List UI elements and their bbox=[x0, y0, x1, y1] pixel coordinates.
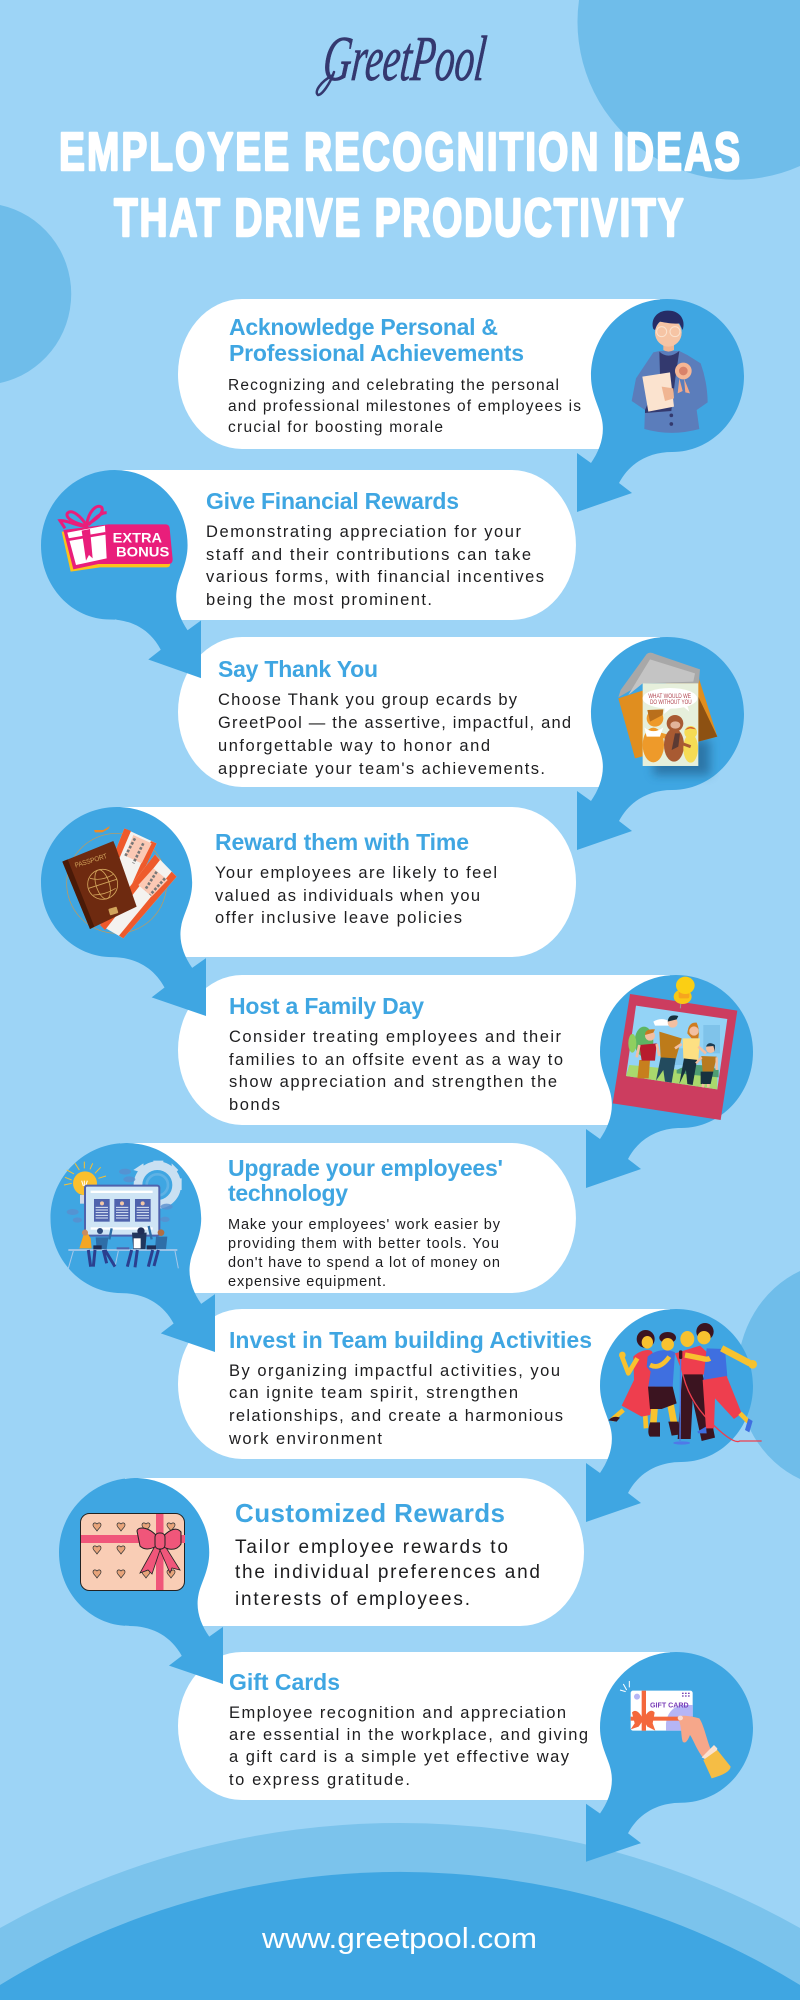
icon: extra bonus gift: EXTRA bbox=[113, 530, 162, 546]
body text bbox=[215, 864, 497, 927]
panel: family day bbox=[178, 975, 753, 1188]
body text: interests of employees. bbox=[235, 1589, 470, 1610]
icon: team with monitor bbox=[64, 1161, 182, 1268]
logo: GreetPool bbox=[320, 23, 490, 94]
heading: technology bbox=[228, 1180, 348, 1206]
panel: personal and professional achievements bbox=[178, 299, 744, 512]
heading: Acknowledge Personal & bbox=[229, 314, 498, 340]
speech bubble bbox=[586, 1652, 753, 1862]
body text: bonds bbox=[229, 1096, 280, 1114]
panel: customized rewards bbox=[59, 1478, 584, 1684]
body text: Employee recognition and appreciation bbox=[229, 1704, 566, 1722]
body text bbox=[228, 1217, 501, 1290]
panel: financial rewards bbox=[41, 470, 576, 678]
icon: gift card in hand bbox=[620, 1681, 731, 1778]
body text: to express gratitude. bbox=[229, 1771, 410, 1789]
body text: Tailor employee rewards to bbox=[235, 1537, 508, 1558]
card background bbox=[125, 1478, 584, 1626]
card background bbox=[178, 299, 660, 449]
card background bbox=[178, 637, 660, 787]
body text: work environment bbox=[228, 1430, 382, 1448]
speech bubble bbox=[577, 299, 744, 512]
logo bbox=[317, 23, 490, 95]
icon: team singing bbox=[608, 1323, 762, 1445]
panel: reward with time bbox=[41, 807, 576, 1016]
speech bubble bbox=[586, 975, 753, 1188]
heading: Reward them with Time bbox=[215, 829, 469, 855]
heading bbox=[228, 1155, 503, 1206]
icon: passport and tickets: PASSPORT bbox=[74, 853, 109, 870]
body text: offer inclusive leave policies bbox=[215, 909, 462, 927]
icon: extra bonus gift bbox=[60, 506, 173, 572]
speech bubble bbox=[586, 1309, 753, 1522]
card background bbox=[115, 470, 576, 620]
body text: valued as individuals when you bbox=[215, 887, 480, 905]
title bbox=[59, 121, 740, 247]
body text: Recognizing and celebrating the personal bbox=[228, 377, 559, 394]
body text: families to an offsite event as a way to bbox=[229, 1051, 563, 1069]
body text: expensive equipment. bbox=[228, 1274, 386, 1290]
title: EMPLOYEE RECOGNITION IDEAS bbox=[59, 121, 740, 181]
icon: greeting card and envelope: DO WITHOUT YOU bbox=[650, 699, 692, 706]
heading: Host a Family Day bbox=[229, 993, 424, 1019]
body text: staff and their contributions can take bbox=[206, 546, 531, 564]
speech bubble bbox=[41, 807, 206, 1016]
body text: various forms, with financial incentives bbox=[206, 568, 544, 586]
body text: are essential in the workplace, and giving bbox=[229, 1726, 588, 1744]
body text: Your employees are likely to feel bbox=[215, 864, 497, 882]
body text bbox=[228, 377, 581, 436]
body text: relationships, and create a harmonious bbox=[229, 1407, 563, 1425]
speech bubble bbox=[41, 470, 201, 678]
body text bbox=[206, 523, 544, 609]
body text: a gift card is a simple yet effective way bbox=[229, 1748, 570, 1766]
body text: Consider treating employees and their bbox=[229, 1028, 562, 1046]
card background bbox=[178, 975, 670, 1125]
panel: team building bbox=[178, 1309, 762, 1522]
heading: Say Thank You bbox=[218, 656, 378, 682]
heading: Give Financial Rewards bbox=[206, 488, 459, 514]
body text: don't have to spend a lot of money on bbox=[228, 1255, 500, 1271]
icon: family polaroid bbox=[613, 977, 737, 1120]
heading: Invest in Team building Activities bbox=[229, 1327, 592, 1353]
icon: greeting card and envelope bbox=[618, 653, 717, 775]
card background bbox=[178, 1309, 670, 1459]
decorative circle top right bbox=[577, 0, 800, 180]
icon: employee with rosette bbox=[632, 311, 708, 433]
speech bubble bbox=[51, 1143, 215, 1352]
footer wave light bbox=[0, 1823, 800, 2000]
card background bbox=[120, 807, 576, 957]
heading: Customized Rewards bbox=[235, 1498, 505, 1528]
footer url: www.greetpool.com bbox=[261, 1923, 537, 1955]
body text bbox=[218, 691, 571, 778]
speech bubble bbox=[577, 637, 744, 850]
decorative circle right bbox=[737, 1271, 800, 1479]
icon: gift card in hand: GIFT CARD bbox=[650, 1702, 689, 1709]
heading bbox=[229, 314, 524, 366]
body text: show appreciation and strengthen the bbox=[229, 1073, 557, 1091]
body text: providing them with better tools. You bbox=[228, 1236, 499, 1252]
body text: appreciate your team's achievements. bbox=[218, 760, 545, 778]
icon: passport and tickets bbox=[62, 826, 177, 938]
body text: the individual preferences and bbox=[235, 1562, 540, 1583]
body text: crucial for boosting morale bbox=[228, 419, 443, 436]
icon: greeting card and envelope: WHAT WOULD WE bbox=[648, 693, 691, 700]
body text: being the most prominent. bbox=[206, 591, 432, 609]
panel: upgrade technology bbox=[51, 1143, 576, 1352]
body text: can ignite team spirit, strengthen bbox=[229, 1384, 518, 1402]
body text: and professional milestones of employees is bbox=[228, 398, 581, 415]
heading: Professional Achievements bbox=[229, 340, 524, 366]
card background bbox=[178, 1652, 670, 1800]
card background bbox=[120, 1143, 576, 1293]
body text bbox=[229, 1704, 588, 1789]
icon: extra bonus gift: BONUS bbox=[116, 544, 169, 560]
body text bbox=[229, 1028, 563, 1114]
panel: say thank you bbox=[178, 637, 744, 850]
footer wave dark bbox=[0, 1872, 800, 2000]
body text: unforgettable way to honor and bbox=[218, 737, 490, 755]
body text: Demonstrating appreciation for your bbox=[206, 523, 522, 541]
title: THAT DRIVE PRODUCTIVITY bbox=[114, 187, 684, 247]
speech bubble bbox=[59, 1478, 223, 1684]
body text bbox=[235, 1537, 540, 1610]
body text: GreetPool — the assertive, impactful, and bbox=[218, 714, 571, 732]
decorative circle left bbox=[0, 205, 71, 383]
body text: By organizing impactful activities, you bbox=[229, 1362, 560, 1380]
body text bbox=[228, 1362, 563, 1448]
heading: Gift Cards bbox=[229, 1669, 340, 1695]
panel: gift cards bbox=[178, 1652, 753, 1862]
heading: Upgrade your employees' bbox=[228, 1155, 503, 1181]
body text: Make your employees' work easier by bbox=[228, 1217, 501, 1233]
body text: Choose Thank you group ecards by bbox=[218, 691, 518, 709]
icon: gift box bbox=[80, 1514, 185, 1590]
